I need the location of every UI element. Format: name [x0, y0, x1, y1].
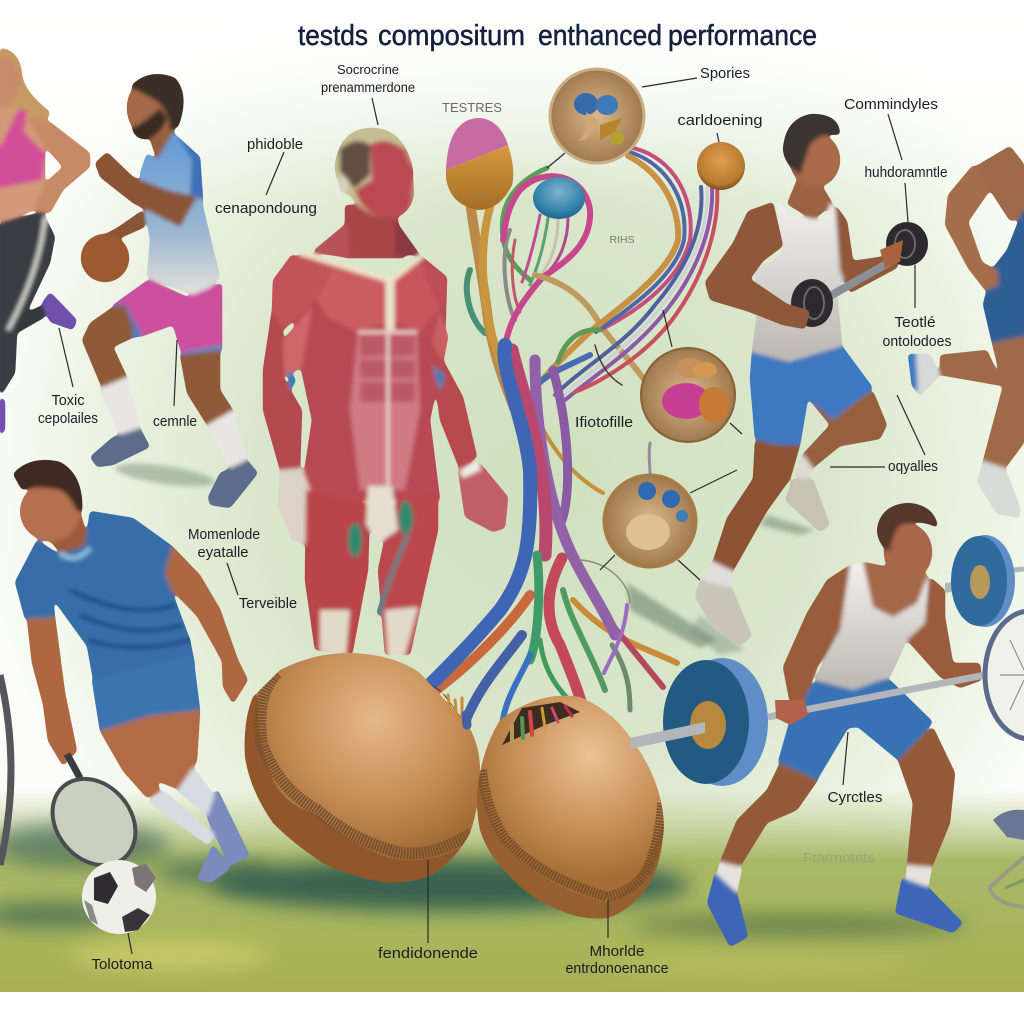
- icon: pink and gold egg: [446, 118, 513, 210]
- tubes: egg stems and upper bundles: [467, 148, 717, 410]
- labels: all annotation text: Mhorlde: [590, 943, 644, 960]
- tubes: stubs entering egg openings: [425, 680, 580, 745]
- callout: lower circle with cells: [604, 475, 696, 567]
- figure: weightlifter lower right: [707, 503, 982, 947]
- labels: all annotation text: fendidonende: [378, 945, 478, 962]
- title: performance: [668, 20, 817, 52]
- labels: all annotation text: Commindyles: [844, 96, 938, 113]
- title: testds: [298, 20, 368, 52]
- figure: basketball player: [81, 74, 258, 508]
- icon: large barbell: [630, 535, 1024, 786]
- icon: large gold right egg: [477, 696, 664, 918]
- labels: all annotation text: cemnle: [153, 413, 197, 430]
- icon: gold sphere: [697, 142, 745, 190]
- labels: all annotation text: eyatalle: [198, 544, 248, 561]
- icon: small barbell: [791, 222, 928, 327]
- labels: all annotation text: huhdoramntle: [864, 164, 948, 181]
- icon: large gold left egg: [244, 653, 480, 882]
- callout: top circle with spores: [550, 69, 644, 163]
- labels: all annotation text: Tolotoma: [92, 956, 153, 973]
- figure: weightlifter left arm front: [705, 202, 810, 329]
- labels: all annotation text: oqyalles: [888, 458, 938, 475]
- labels: all annotation text: cenapondoung: [215, 200, 317, 217]
- title: enthanced: [538, 20, 662, 52]
- labels: all annotation text: Momenlode: [188, 526, 260, 543]
- labels: all annotation text: Terveible: [239, 595, 297, 612]
- labels: all annotation text: ontolodoes: [882, 333, 952, 350]
- labels: all annotation text: TESTRES: [442, 100, 502, 115]
- labels: all annotation text: phidoble: [247, 136, 303, 153]
- icon: soccer ball: [82, 860, 156, 934]
- labels: all annotation text: Socrocrine: [337, 62, 399, 77]
- labels: all annotation text: [38, 62, 952, 977]
- labels: all annotation text: Cyrctles: [828, 789, 882, 806]
- labels: all annotation text: prenammerdone: [321, 79, 415, 95]
- labels: all annotation text: RIHS: [610, 235, 635, 246]
- callout: middle circle with organs: [641, 348, 735, 442]
- figure: runner far right: [908, 146, 1024, 518]
- figure: weightlifter upper right: [695, 114, 903, 646]
- label leader lines: [59, 78, 925, 954]
- icon: exercise bike corner: [990, 810, 1024, 907]
- labels: all annotation text: Toxic: [52, 392, 85, 409]
- figure: anatomy muscle body: [263, 128, 508, 655]
- tubes: main cord and lower branches: [430, 345, 677, 745]
- labels: all annotation text: cepolailes: [38, 410, 98, 427]
- icon: bicycle wheel left edge: [0, 675, 11, 865]
- labels: all annotation text: Ftarmotnts: [803, 850, 876, 865]
- labels: all annotation text: carldoening: [678, 112, 762, 129]
- labels: all annotation text: entrdonoenance: [566, 960, 668, 977]
- title: [298, 20, 817, 52]
- labels: all annotation text: Spories: [700, 65, 750, 82]
- title: compositum: [378, 20, 525, 52]
- icon: blue sphere: [533, 177, 585, 219]
- figure: woman runner top left: [0, 48, 90, 437]
- labels: all annotation text: Ifiotofille: [575, 414, 633, 431]
- labels: all annotation text: Teotlé: [894, 314, 936, 331]
- figure: tennis player in blue: [11, 460, 250, 883]
- icon: tennis racket: [35, 754, 153, 882]
